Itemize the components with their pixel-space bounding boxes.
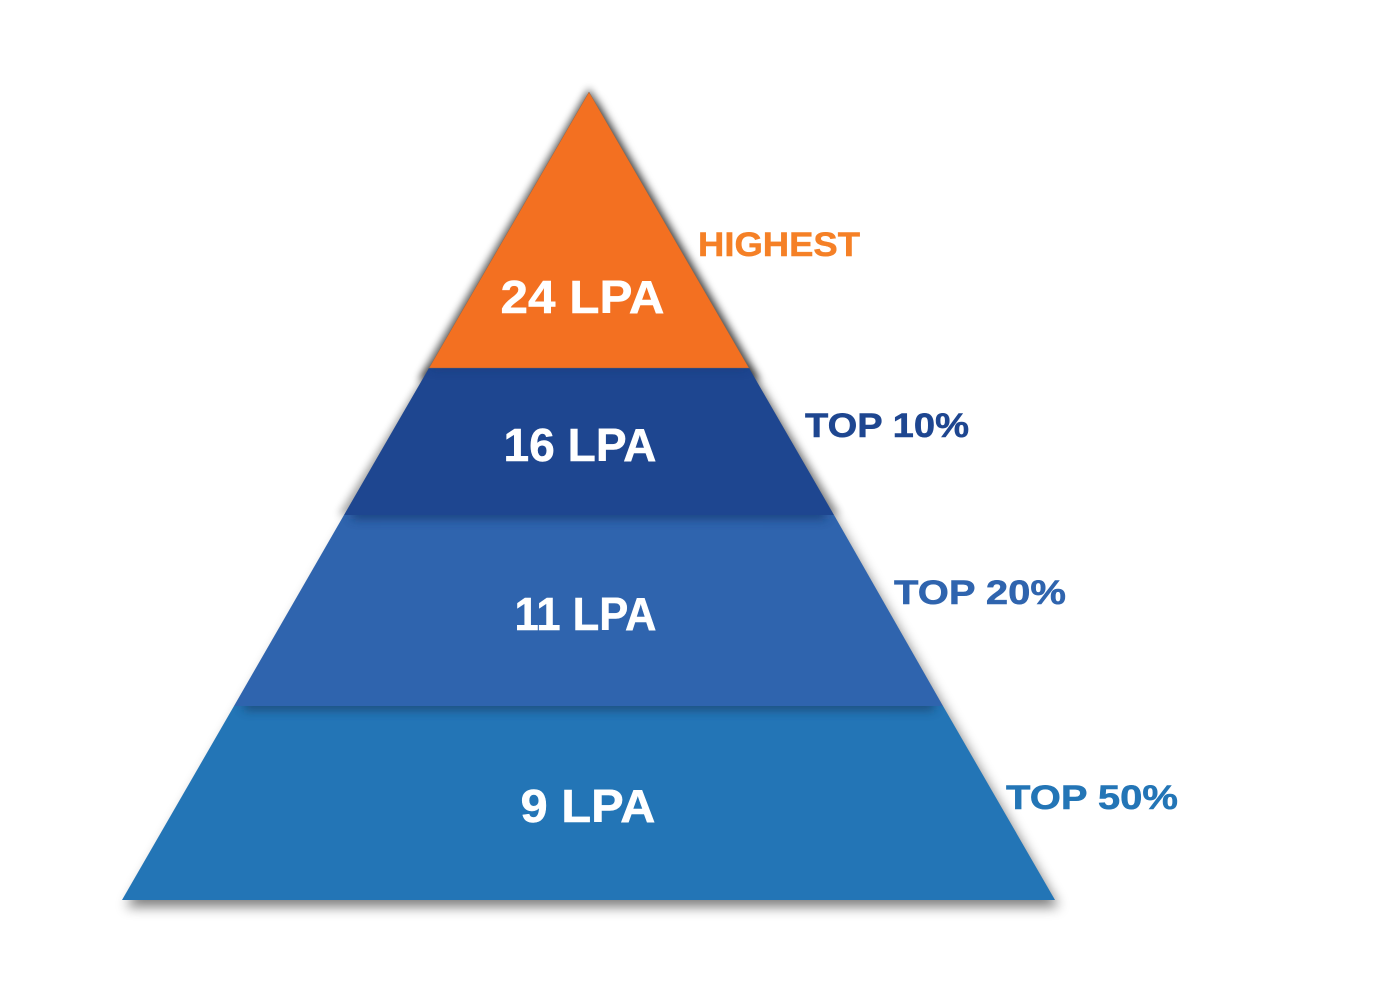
tier: 16 LPA [344,368,834,515]
tier: 24 LPA [429,92,749,368]
tier shadow strips [244,362,934,710]
label: 16 LPA: 16 LPA [504,419,656,471]
side label: HIGHEST: HIGHEST [698,226,860,264]
pyramid shadow [126,88,1059,907]
label: 24 LPA: 24 LPA [500,271,664,323]
label: 9 LPA: 9 LPA [520,780,656,832]
tier: 9 LPA [122,706,1055,900]
pyramid [122,92,1055,900]
side label: TOP 10%: TOP 10% [805,407,969,445]
side label: TOP 20%: TOP 20% [894,574,1066,612]
tier: 11 LPA [234,515,943,706]
side label: TOP 50%: TOP 50% [1006,779,1178,817]
label: 11 LPA: 11 LPA [514,588,656,640]
